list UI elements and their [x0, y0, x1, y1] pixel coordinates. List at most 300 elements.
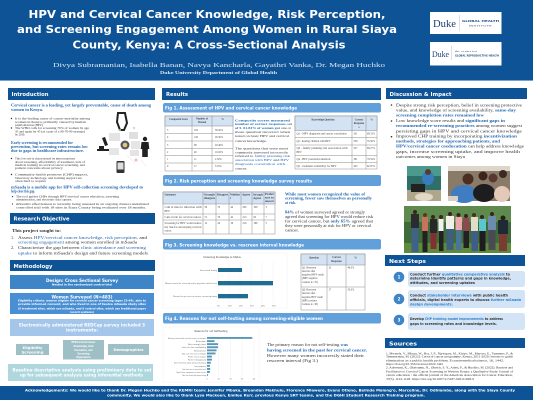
table: rescreen interval: negative (HPV result — [302, 274, 324, 276]
table: composite scores: 1 — [167, 158, 169, 161]
box: eligibility screening — [16, 344, 49, 355]
table: composite scores: 5 — [167, 129, 169, 132]
box: women surveyed: provide informed consent, and who lived in one of twelve mSaada study sites — [18, 302, 147, 306]
table: composite scores: 126 — [194, 136, 199, 139]
table: composite scores: 10.02% — [215, 151, 224, 154]
fig 4 commentary: rescreen interval (Fig 3.) — [267, 358, 319, 363]
bar chart: screening knowledge vs status: Planned to get cervical cancer screening today — [173, 295, 217, 298]
intro bullets: barriers: laboratory technology, and training support are — [15, 176, 83, 181]
bar chart: reasons for not self-testing: Prefer not to answer — [188, 356, 206, 358]
step 2 — [394, 290, 525, 308]
box: REDCap survey: Electronically administered REDCap survey included 3 — [19, 323, 145, 328]
step 1: 1 — [398, 274, 401, 280]
table: risk perception: 200 — [242, 206, 247, 209]
references: cancer education : the official journal of the American Association for Cancer Education, — [386, 373, 513, 377]
bar chart: reasons for not self-testing: I do not trust lab processing — [182, 374, 206, 377]
fig 2 commentary: 84% of women surveyed agreed or strongly — [285, 211, 365, 215]
bar chart: screening knowledge vs status: 10% — [228, 306, 232, 308]
table: knowledge questions: Q2 - hearing children with HPV — [296, 140, 331, 143]
icon: tablet device — [116, 161, 124, 173]
table: rescreen interval: 50.0% — [348, 288, 355, 291]
icon: microscope — [97, 137, 109, 151]
table: knowledge questions: 327 — [354, 147, 358, 150]
table: rescreen interval: (HPV negative — [302, 277, 318, 280]
bar chart: reasons for not self-testing: Having screened for cervical cancer in the past — [168, 337, 206, 340]
fig 4 heading: Fig 4. Reasons for not self-testing among screening-eligible women — [165, 316, 323, 322]
step 1: determine identify patterns and gaps in knowledge, — [410, 276, 511, 280]
intro bullets: barriers: patient concerns about privacy — [15, 166, 63, 170]
box: knowledge and risk instrument: HPV/Cervical Cancer — [72, 341, 96, 344]
fig 2 commentary: screening, fewer saw themselves as personally — [285, 197, 372, 201]
table: knowledge questions: Q1 - HPV diagnosis and cancer correlation — [296, 132, 347, 136]
table: risk perception: 16 — [230, 222, 234, 225]
objective list: 2. — [11, 245, 14, 250]
table: risk perception: cancer. — [164, 230, 172, 232]
table: composite scores: Composite Score — [169, 118, 189, 121]
intro bullets: mSaada — [12, 195, 150, 209]
discussion bullets: recommended re-screening practices among women suggest — [396, 123, 523, 128]
title: HPV and Cervical Cancer Knowledge, Risk Perception, — [28, 9, 386, 21]
objective list: 1. — [11, 235, 14, 240]
table: risk perception: r — [230, 197, 232, 200]
intro bullets: barriers: often hard to acquire — [15, 179, 47, 183]
intro lead sentence — [11, 103, 151, 112]
title: County, Kenya: A Cross-Sectional Analysis — [72, 40, 346, 52]
bar chart: reasons for not self-testing: Not sure the test is reliable — [182, 352, 206, 355]
box: knowledge and risk instrument: Knowledge, Risk — [74, 345, 94, 348]
table: risk perception: 44 — [230, 206, 234, 209]
bar chart: reasons for not self-testing: I do not see a need to test — [182, 368, 206, 371]
table: rescreen interval: (HPV positive — [302, 300, 318, 302]
table: risk perception: 108 — [254, 206, 258, 209]
fig 1 commentary: commonly answered incorrectly — [235, 150, 288, 154]
panel: results — [162, 88, 381, 382]
table: knowledge questions: 70.56% — [367, 140, 376, 143]
references: 37(5), 1122-1128. https://doi.org/10.1007/s13187-020-01928-9 — [386, 377, 475, 381]
icon: woman silhouette — [141, 137, 149, 157]
heading: discussion and impact — [386, 88, 527, 99]
objective list: Characterize the gap between clinic attendance and screening — [18, 245, 147, 250]
intro bullets: burden — [11, 117, 90, 137]
intro bullets: mSaada: administration, and electronic data capture. — [16, 198, 72, 203]
step 1 — [394, 271, 525, 287]
table: knowledge questions: Q3 - family planning risk association with — [296, 147, 348, 150]
table: composite scores: 183 — [194, 129, 199, 132]
title: and Screening Engagement Among Women in Rural Siaya — [17, 24, 397, 36]
bar chart: screening knowledge vs status: 30% — [250, 306, 254, 308]
bar chart: reasons for not self-testing: Partner disapproval — [188, 359, 207, 362]
bar chart: reasons for not self-testing: Reasons for not Self-testing — [195, 330, 228, 333]
fig 2 commentary: for cervical cancer, but only 65% agreed that — [285, 219, 374, 224]
logo: Duke Global Reproductive Health — [430, 42, 502, 66]
discussion bullets: screening completion rates remained low — [396, 113, 484, 118]
table: knowledge questions: 92.07% — [367, 165, 376, 168]
box: eligibility screening: Eligibility — [22, 345, 43, 350]
fig 1 commentary: association with HPV and HPV — [235, 158, 290, 162]
table: knowledge questions — [295, 116, 377, 169]
box: demographics: Demographics — [114, 347, 144, 352]
table: risk perception: answer — [265, 200, 275, 203]
table: rescreen interval: interval after — [302, 292, 315, 295]
acknowledgements footer — [0, 386, 533, 400]
bar chart: screening knowledge vs status: 40% — [261, 306, 265, 308]
table: knowledge questions: Q4 - HPV prevention methods — [296, 158, 330, 161]
fig 4 heading — [163, 313, 381, 324]
table: knowledge questions: Knowledge Question — [312, 118, 335, 122]
panel: next steps — [385, 255, 525, 330]
fig 4 commentary: The primary reason for not self-testing was — [267, 342, 348, 347]
table: risk perception: 70 — [218, 206, 221, 209]
fig 1 commentary: more question incorrect when — [235, 130, 290, 134]
table: knowledge questions: 78.54% — [367, 158, 376, 161]
intro bullets: barriers: medical training in cervical cancer screening, and — [15, 163, 85, 168]
box: women surveyed: record systems) — [70, 310, 94, 314]
logo: Duke Global Health Institute: Duke — [433, 19, 457, 30]
table: risk perception: Agree — [253, 197, 262, 200]
objective list: Assess HPV/cervical cancer knowledge, risk perception, and — [18, 235, 148, 241]
logo: Duke Global Reproductive Health: GLOBAL REPRODUCTIVE HEALTH — [455, 54, 499, 58]
intro bullets: burden: women in Kenya, primarily caused by human — [15, 120, 86, 125]
heading: research objective — [10, 213, 155, 224]
table: risk perception: 7 — [266, 216, 268, 219]
box: knowledge and risk instrument — [63, 340, 104, 360]
fig 2 commentary: they were personally at risk for HPV or cervical — [285, 224, 371, 228]
heading: methodology — [10, 260, 155, 271]
fig 1 commentary: of 5. 61.84% of women got one or — [235, 126, 292, 130]
intro bullets: mSaada: The tool guides CHPs through HPV/cervical cancer education, screening — [16, 195, 120, 200]
intro bullets: barriers: about screening, affordability of treatment, lack of — [15, 160, 86, 165]
fig 4 commentary: having screened in the past for cervical cancer. — [267, 347, 367, 352]
bar chart: reasons for not self-testing: Not enough time — [188, 343, 206, 346]
affiliation: Duke University Department of Global Health — [160, 70, 278, 75]
box: women surveyed: Eligibility criteria: women eligible for cervical cancer screening (ages 25-64), able to — [18, 298, 146, 302]
bar chart: reasons for not self-testing: 10 — [218, 378, 220, 380]
intro bullets: barriers: This low rate is characterized by misconceptions — [15, 157, 76, 161]
table: composite scores: 4 — [167, 136, 169, 139]
discussion bullets: Low knowledge score results and significant gaps in — [396, 118, 506, 123]
step 3: Develop CHP training model improvements to address — [410, 317, 503, 321]
bar chart: reasons for not self-testing: 30 — [241, 378, 243, 380]
table: rescreen interval: 46.0% — [348, 266, 355, 270]
table: risk perception: 5 — [266, 222, 268, 225]
table: risk perception — [163, 192, 275, 234]
acknowledgements footer: community. We would also like to thank Lysa Mackeen, Emilee Kerr, previous Kenya SRT teams, and the DGHI Student Research Training program. — [107, 394, 425, 398]
table: composite scores: 0 — [167, 165, 169, 168]
table: risk perception: HPV. — [164, 210, 170, 213]
discussion bullets — [391, 102, 524, 159]
table: composite scores: 2 — [167, 151, 169, 154]
bar chart: reasons for not self-testing: Distance — [194, 349, 206, 352]
bar chart: reasons for not self-testing: 0 — [206, 378, 208, 380]
references: elimination as a public health problem. Ecancermedicalscience, 16, 1442. — [386, 358, 504, 362]
intro bullets: barriers — [11, 157, 88, 183]
table: risk perception: 186 — [254, 222, 258, 225]
box: baseline analysis — [8, 364, 153, 381]
table: risk perception: disagree — [204, 197, 216, 200]
fig 3 heading — [163, 239, 381, 250]
table: risk perception: Statement — [164, 194, 176, 196]
table: composite scores: 38.20% — [215, 129, 224, 132]
fig 1 commentary: The questions that were most — [235, 146, 288, 150]
intro heading: mSaada: help close this gap. — [11, 189, 35, 193]
table: rescreen interval: Response — [331, 260, 343, 263]
table: composite scores: 26.30% — [215, 136, 224, 139]
table: rescreen interval: negative HPV result — [302, 296, 323, 299]
table: composite scores: Number of — [196, 117, 208, 120]
bar chart: reasons for not self-testing: Don't know how about safety and privacy — [174, 362, 206, 365]
acknowledgements footer: Acknowledgements: We would like to thank Dr. Megan Huchko and the KEMRI team: Jennifer Mbaka, Breandan Makhulu, Florence Miawere, Evans Otieno, Belinda Malong'o, Marceline, Dr. Odhiambo, along with the Siaya County — [25, 388, 516, 392]
step 2: officials, digital health experts to discuss further mSaada — [410, 298, 522, 302]
references: 1. Mwenda, V., Mburu, W., Bor, J. P., Njyiogare, M., Kirtyo, M., Mayoro, E., Tummers, P., & — [386, 351, 514, 355]
box: women surveyed: Women Surveyed (N=483) — [52, 294, 113, 299]
table: risk perception: Disagree — [217, 194, 229, 196]
intro bullets: mSaada: mSaada's effectiveness is currently being assessed in an ongoing cluster-randomized — [16, 202, 150, 206]
table: risk perception: Neithe — [230, 194, 241, 196]
bar chart: reasons for not self-testing: Fear — [196, 340, 207, 343]
fig 1 commentary: tested on basic HPV and cervical — [235, 134, 289, 138]
bar chart: screening knowledge vs status: Women cannot be screened unless physician said to have — [165, 282, 217, 285]
table: composite scores: 17 — [194, 165, 197, 168]
bar chart: reasons for not self-testing: 40 — [253, 378, 255, 380]
bar chart: screening knowledge vs status: 50% — [272, 306, 276, 308]
box: women surveyed: (6 treatment sites, which use mSaada, and 6 control sites, which use traditional paper — [18, 306, 147, 310]
step 1: attitudes, and screening uptakes — [410, 281, 475, 285]
table: composite scores: 11 — [194, 158, 197, 161]
table: knowledge questions: % — [370, 118, 373, 122]
references: 2. Adewumi, K., Oketonmu, N., Oketch, S. Y., Adesi, F., & Huchko, M. (2022). Barriers and — [386, 366, 514, 370]
discussion bullets: value, and knowledge of screening availability, same-day — [396, 108, 517, 114]
table: risk perception: Strongly — [204, 194, 216, 196]
fig 4 commentary: However many women incorrectly stated their — [267, 353, 365, 358]
box: knowledge and risk instrument: Experience — [76, 356, 91, 359]
table: composite scores: 98 — [194, 144, 197, 147]
discussion bullets: persisting gaps in HPV and cervical cancer knowledge — [396, 128, 522, 133]
box: demographics — [108, 344, 149, 355]
table: risk perception: 12 — [204, 222, 208, 225]
panel: discussion and impact — [386, 88, 527, 253]
objective list — [11, 235, 148, 256]
discussion bullets: outcomes among women in Siaya — [396, 154, 465, 159]
photo: group portrait — [404, 206, 511, 253]
intro bullets: burden: The WHO calls for screening 70% of women by age — [15, 126, 90, 130]
objective list: screening engagement among women enrolled in mSaada — [18, 240, 137, 245]
box: baseline analysis: Baseline descriptive analysis using preliminary data to set — [12, 368, 152, 372]
authors: Divya Subramanian, Isabella Banan, Navya Kancharla, Gayathri Vanka, Dr. Megan Huchko — [53, 62, 386, 69]
fig 1 commentary: referred to family planning risk — [235, 154, 290, 158]
table: rescreen interval — [301, 254, 365, 310]
box: knowledge and risk instrument: Screening — [78, 352, 90, 356]
bar chart: screening knowledge vs status: Screening Knowledge vs Status — [203, 256, 242, 259]
table: risk perception: 24 — [218, 222, 221, 225]
table: knowledge questions: 331 — [354, 132, 358, 136]
box: baseline analysis: up for subsequent analysis using inferential methods — [20, 372, 143, 378]
intro heading: early screening: due to gaps in healthcare infrastructure. — [11, 149, 84, 153]
panel: sources — [385, 338, 525, 381]
fig 1 heading — [163, 103, 381, 112]
fig 2 commentary — [285, 192, 374, 232]
step 3: 3 — [398, 318, 401, 322]
table: knowledge questions: 68.27% — [367, 147, 376, 150]
logo: Duke Global Health Institute — [430, 12, 502, 34]
intro bullets: burden: 35 and again by 45 (as a part of a 90-70-90 strategy) — [15, 129, 85, 133]
objective list: uptake to inform mSaada's design and future screening models — [18, 250, 148, 256]
table: risk perception: Agree — [242, 194, 251, 196]
bar chart: screening knowledge vs status: 20% — [239, 306, 243, 308]
intro diagram: mSaada workflow icons — [97, 113, 149, 173]
step 2: design developments. — [410, 302, 453, 306]
discussion bullets: gaps, increase screening uptake, and improve health — [396, 149, 521, 155]
table: composite scores: Women — [198, 121, 207, 124]
table: risk perception: I am at risk for infection with — [164, 206, 202, 209]
fig 2 commentary: cancer. — [285, 228, 299, 232]
table: knowledge questions: 68.53% — [367, 132, 376, 136]
step 3: gaps in screening rates and knowledge levels. — [410, 322, 497, 326]
table: composite scores — [165, 116, 233, 171]
table: knowledge questions: Correct — [355, 118, 363, 122]
intro bullets: burden: It is the leading cause of cancer mortality among — [15, 117, 90, 121]
intro heading: early screening: Early screening is recommended for — [11, 141, 73, 145]
intro bullets: burden: by 2030. — [15, 133, 25, 137]
fig 1 commentary: Composite scores measured — [235, 118, 290, 122]
heading: introduction — [8, 88, 155, 100]
logo: Duke Global Health Institute: GLOBAL HEALTH — [462, 19, 500, 23]
table: composite scores: % — [221, 118, 224, 121]
table: composite scores: 3.55% — [215, 165, 223, 168]
table: rescreen interval: interval after — [302, 270, 315, 273]
header banner — [0, 0, 533, 81]
table: risk perception: 95 — [254, 216, 257, 219]
table: composite scores: 20.46% — [215, 144, 224, 147]
heading: sources: Sources — [389, 342, 418, 348]
table: risk perception: 58 — [204, 206, 208, 209]
table: risk perception: 76 — [218, 216, 221, 219]
table: risk perception: my risk for developing cervical — [164, 226, 202, 229]
table: risk perception: Screening for HPV would reduce — [164, 222, 202, 225]
table: rescreen interval: Question — [309, 256, 320, 260]
heading: introduction: Introduction — [12, 92, 49, 98]
panel: methodology — [8, 260, 155, 381]
fig 3 heading: Fig 3. Screening knowledge vs. rescreen interval knowledge — [165, 242, 304, 248]
bar chart: reasons for not self-testing: Lack of clinic availability — [182, 346, 206, 349]
table: risk perception: 51 — [204, 216, 208, 219]
bar chart: screening knowledge vs status — [163, 253, 287, 308]
bar chart: screening knowledge vs status: 0% — [217, 306, 220, 308]
fig 2 commentary: agreed that screening for HPV would reduce risk — [285, 215, 373, 219]
table: rescreen interval: Q2: Rescreen — [302, 288, 317, 291]
table: risk perception: 219 — [242, 222, 247, 225]
references: https://doi.org/10.3332/ecancer.2022.1442 — [386, 362, 444, 366]
references — [386, 351, 514, 381]
logo: Duke Global Reproductive Health: the center for — [455, 50, 477, 53]
discussion bullets: methods, strategies for approaching patients, and — [396, 139, 501, 144]
heading: methodology: Methodology — [14, 264, 53, 270]
box: REDCap survey — [10, 319, 154, 336]
step 2: 2 — [398, 296, 401, 302]
step 2: Conduct stakeholder interviews with public health — [410, 293, 509, 297]
fig 2 heading: Fig 2. Risk perception and screening knowledge survey results — [165, 178, 312, 184]
table: rescreen interval: Correct — [332, 256, 341, 259]
table: risk perception: not to — [265, 196, 275, 200]
heading: discussion and impact: Discussion & Impact — [390, 92, 452, 98]
discussion bullets: Despite strong risk perception, belief in screening protective — [396, 102, 522, 108]
fig 1 heading: Fig 1. Assessment of HPV and cervical cancer knowledge — [165, 106, 297, 112]
table: composite scores: 2.30% — [215, 158, 223, 161]
table: knowledge questions: 381 — [354, 158, 358, 161]
intro heading: mSaada: mSaada is a mobile app for HPV self-collection screening developed to — [11, 186, 143, 190]
bar chart: reasons for not self-testing: I am pregnant — [194, 365, 206, 368]
fig 1 commentary: number of correct responses out — [235, 122, 292, 126]
table: composite scores: 3 — [167, 144, 169, 147]
panel: introduction — [8, 88, 155, 209]
bar chart: reasons for not self-testing: I don't have symptoms or other issues — [176, 371, 206, 374]
box: women surveyed — [10, 293, 154, 314]
box: study design: Nested in the randomized control trial — [52, 284, 112, 286]
references: Facilitators to Cervical Cancer Screening in Western Kenya: a Qualitative Study. Journal of — [386, 370, 513, 374]
table: rescreen interval: Q1: Rescreen — [302, 266, 317, 270]
box: study design — [10, 275, 154, 289]
box: REDCap survey: instruments: — [66, 328, 98, 333]
table: rescreen interval: 17 — [328, 288, 332, 291]
logo: Duke Global Health Institute: INSTITUTE — [469, 26, 494, 28]
icon: hand with swab — [117, 113, 127, 130]
table: risk perception: 3 — [266, 206, 268, 209]
fig 1 commentary: diagnosis correlation with — [235, 162, 285, 166]
title — [17, 9, 397, 52]
central wheel — [109, 127, 146, 166]
table: rescreen interval: 32 — [328, 266, 332, 270]
bar chart: screening knowledge vs status: Screened today — [200, 269, 217, 272]
logo: Duke Global Reproductive Health: Duke — [432, 50, 449, 59]
table: knowledge questions: Q5 - treatment availability for HPV — [296, 165, 337, 168]
table: risk perception: I am at risk for cervical cancer. — [164, 216, 202, 219]
fig 1 commentary: cancer. — [235, 166, 247, 170]
intro heading: mSaada — [11, 186, 143, 193]
references: Temmerman, M. (2022). Cervical cancer programme, Kenya, 2011-2020: lessons to guide — [386, 355, 514, 359]
fig 1 commentary: cancer knowledge. — [235, 139, 267, 143]
photo: field work — [407, 166, 441, 201]
table: rescreen interval: % — [354, 256, 357, 260]
heading: results — [162, 88, 381, 100]
table: knowledge questions: HPV — [296, 151, 302, 154]
table: knowledge questions: 338 — [354, 140, 358, 143]
table: risk perception: 213 — [242, 216, 247, 219]
table: risk perception: 42 — [230, 216, 234, 219]
heading: results: Results — [166, 92, 189, 98]
intro bullets: burden: papillomavirus (HPV) — [15, 123, 43, 127]
intro bullets: mSaada: controlled trial with 18 sites in Siaya County being evaluated over 18 months. — [16, 205, 146, 209]
table: risk perception: Strongly — [253, 194, 264, 196]
photo: team in vehicle — [448, 166, 510, 203]
fig 4 commentary — [267, 342, 367, 363]
objective lead: This project sought to: — [12, 228, 61, 233]
step 3 — [394, 313, 525, 330]
table: knowledge questions: s — [358, 126, 360, 129]
discussion bullets: HPV/cervical cancer coeducation can help address knowledge — [396, 144, 524, 149]
panel: research objective — [10, 213, 155, 256]
intro bullets: barriers: Community health promoter (CHP) support, — [15, 173, 88, 178]
heading: next steps: Next Steps — [389, 259, 427, 265]
discussion bullets: Improved CHP training by incorporating incentivization — [396, 133, 518, 138]
intro heading: early screening — [11, 141, 88, 153]
fig 2 commentary: at risk. — [285, 201, 296, 205]
fig 1 commentary — [235, 118, 292, 170]
bar chart: reasons for not self-testing: 20 — [230, 378, 232, 380]
box: eligibility screening: Screening — [22, 350, 44, 354]
table: composite scores: 49 — [194, 151, 197, 154]
table: risk perception: Prefer — [265, 193, 275, 196]
bar chart: reasons for not self-testing — [163, 327, 259, 382]
fig 2 heading — [163, 175, 381, 186]
